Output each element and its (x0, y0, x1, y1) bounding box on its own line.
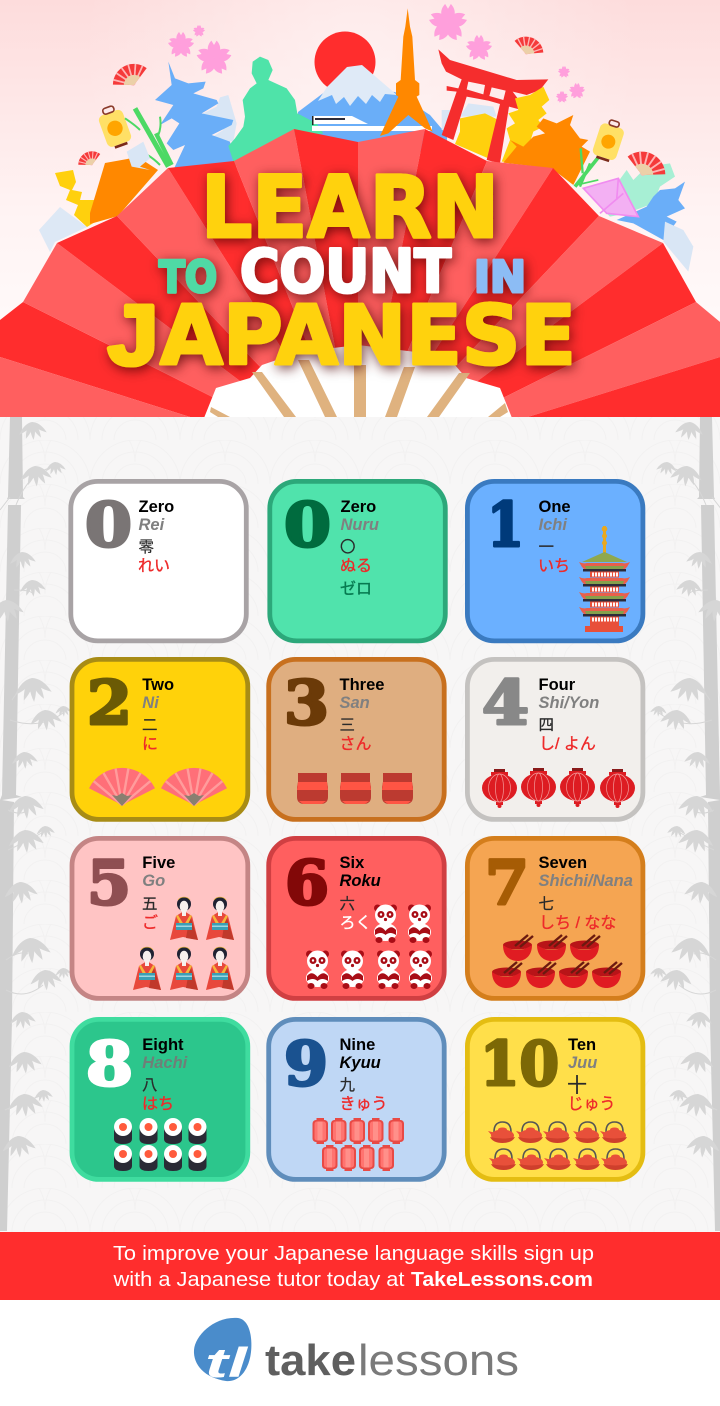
card: two ni (72, 659, 248, 819)
card: three san: さん (340, 735, 372, 753)
icon: pale blocks (442, 103, 497, 130)
card: two ni: に (142, 736, 158, 753)
title (108, 158, 576, 384)
card: three san: 3 (284, 668, 329, 739)
card: five go: 5 (87, 848, 131, 919)
card: six roku: ろく (340, 915, 372, 932)
icon: blue pagoda (155, 62, 235, 170)
logo: takelessons (194, 1318, 519, 1386)
panel: patterned background (0, 417, 720, 1232)
card: zero rei: Rei (138, 516, 165, 534)
card: seven shichi/nana: Seven (538, 854, 587, 872)
title: APANESE (160, 289, 576, 384)
icon: three cups (297, 773, 413, 804)
card: eight hachi: 8 (86, 1029, 133, 1100)
icon: seven bowls (492, 935, 622, 988)
icon: pink bridge (583, 178, 638, 217)
icon: ten teapots (488, 1122, 628, 1170)
icon: flowers (167, 4, 585, 103)
card: zero nuru: Nuru (340, 516, 379, 534)
card: nine kyuu (269, 1019, 444, 1179)
card: five go: Five (142, 854, 175, 872)
logo: takelessons: tl (205, 1339, 249, 1386)
icon: left orange temple (90, 157, 158, 224)
icon: orange temple (503, 115, 590, 185)
logo: takelessons: take (265, 1336, 356, 1385)
logo: takelessons: lessons (358, 1336, 519, 1385)
card: nine kyuu: Nine (340, 1036, 375, 1054)
card: six roku (269, 838, 444, 998)
icon: mount fuji (298, 65, 447, 152)
card: seven shichi/nana: 七 (538, 895, 554, 913)
icon: tokyo tower (380, 8, 433, 136)
card: nine kyuu: 9 (284, 1029, 328, 1100)
card: nine kyuu: きゅう (340, 1095, 388, 1113)
card: four shi/yon: し/ よん (539, 736, 596, 753)
icon: torii gate (438, 49, 548, 163)
card: nine kyuu: Kyuu (340, 1054, 381, 1072)
card: zero rei: 零 (138, 538, 154, 556)
card: nine kyuu: 九 (340, 1076, 356, 1094)
card: two ni: 2 (87, 668, 132, 739)
card: seven shichi/nana: しち / なな (539, 914, 616, 932)
card: zero rei (71, 481, 246, 641)
card: zero rei: れい (138, 558, 170, 575)
card: zero nuru (270, 481, 445, 641)
card: six roku: 六 (340, 895, 355, 913)
title: LEARN (201, 158, 499, 258)
card: seven shichi/nana: 7 (485, 848, 529, 919)
card: zero nuru: 〇 (340, 538, 356, 556)
header background (0, 0, 720, 418)
card: eight hachi: Eight (142, 1036, 184, 1054)
card: four shi/yon: Shi/Yon (538, 694, 599, 712)
title: IN (474, 252, 526, 303)
card: one ichi: One (538, 498, 571, 516)
icon: small fans (75, 32, 671, 184)
icon: blue pagoda right (617, 182, 685, 240)
title: TO (159, 252, 217, 303)
card: zero rei: 0 (85, 490, 132, 561)
card: four shi/yon: 四 (538, 717, 554, 734)
banner: call to action: TakeLessons.com (411, 1268, 593, 1291)
icon: eight sushi rolls (114, 1118, 206, 1171)
icon: right bamboo border (649, 417, 720, 1231)
card: three san: Three (340, 676, 384, 694)
card: two ni: 二 (142, 717, 158, 734)
card: four shi/yon: 4 (482, 668, 529, 739)
card: three san: San (340, 694, 370, 712)
card: ten juu (467, 1019, 643, 1179)
card: one ichi: 一 (538, 539, 554, 556)
icon: right lantern (591, 117, 627, 164)
icon: four lanterns (482, 768, 635, 808)
skyline: right landmarks (380, 8, 693, 272)
icon: left pale pagoda (39, 207, 87, 252)
card: eight hachi: Hachi (142, 1054, 188, 1072)
card: four shi/yon (467, 659, 643, 819)
card: one ichi (467, 481, 643, 641)
icon: six pandas (306, 904, 432, 989)
icon: bullet train (312, 116, 432, 131)
skyline: left landmarks (95, 57, 323, 170)
card: ten juu: Ten (568, 1036, 596, 1054)
card: zero nuru: Zero (340, 498, 376, 516)
icon: pagoda (579, 526, 630, 632)
icon: pale pagoda right (663, 222, 693, 272)
card: six roku: Roku (340, 872, 381, 890)
card: seven shichi/nana: Shichi/Nana (538, 872, 633, 890)
title: J (108, 288, 158, 382)
card: five go (72, 838, 248, 998)
card: seven shichi/nana (467, 838, 643, 998)
card: three san (269, 659, 444, 819)
big fan (0, 129, 720, 417)
banner: call to action: To improve your Japanese language skills sign up (113, 1242, 594, 1265)
icon: pale pagoda shadow (200, 95, 237, 142)
icon: yellow temple (455, 113, 500, 163)
icon: sun (314, 32, 376, 92)
icon: yellow pagoda (502, 87, 549, 163)
card: one ichi: Ichi (538, 516, 567, 534)
banner: call to action (0, 1232, 720, 1300)
card: four shi/yon: Four (538, 676, 576, 694)
icon: left bamboo border (0, 417, 73, 1231)
card: ten juu: Juu (568, 1054, 597, 1072)
card: ten juu: 10 (480, 1029, 559, 1100)
card: two ni: Two (142, 676, 174, 694)
card: one ichi: いち (538, 558, 570, 575)
icon: nine paper lanterns (312, 1118, 404, 1171)
card: six roku: 6 (285, 848, 329, 919)
card: one ichi: 1 (487, 490, 524, 561)
card: two ni: Ni (142, 694, 159, 712)
card: zero rei: Zero (138, 498, 174, 516)
icon: two fans (89, 768, 227, 806)
card: five go: 五 (142, 896, 158, 913)
card: zero nuru: ゼロ (340, 580, 372, 598)
footer background (0, 1300, 720, 1406)
card: zero nuru: 0 (284, 490, 331, 561)
card: eight hachi (72, 1019, 248, 1179)
icon: left lantern (95, 103, 134, 151)
card: ten juu: 十 (567, 1074, 587, 1097)
icon: buddha statue (228, 57, 323, 167)
title: COUNT (240, 237, 451, 307)
card: five go: Go (142, 872, 165, 890)
card: eight hachi: 八 (142, 1077, 158, 1094)
icon: teal pagoda (600, 163, 675, 217)
icon: left yellow pagoda (55, 170, 103, 227)
icon: left bamboo (125, 108, 172, 167)
card: five go: ご (142, 914, 158, 932)
card: ten juu: じゅう (568, 1096, 616, 1113)
icon: five geisha (133, 897, 234, 990)
card: three san: 三 (340, 717, 355, 734)
card: eight hachi: はち (142, 1096, 174, 1113)
banner: call to action: with a Japanese tutor today at (112, 1268, 405, 1291)
icon: pale block (127, 142, 150, 170)
card: six roku: Six (340, 854, 365, 872)
icon: right bamboo (575, 148, 598, 187)
card: zero nuru: ぬる (340, 558, 372, 575)
